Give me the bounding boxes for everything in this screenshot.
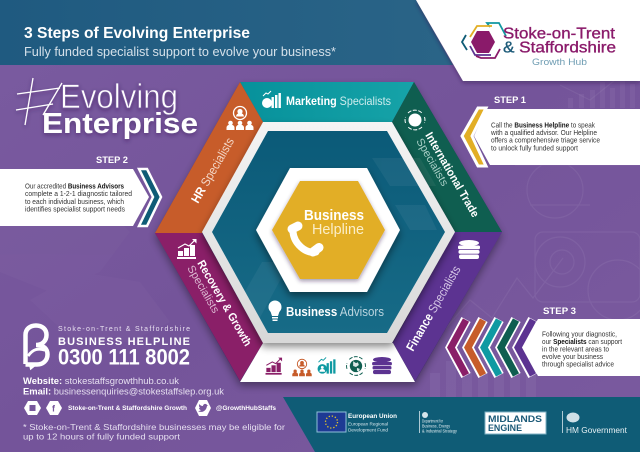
footnote — [23, 422, 285, 442]
inner white ring — [202, 122, 455, 343]
helpline contact block: 0300 111 8002 — [58, 344, 190, 370]
Department for Business logo: & Industrial Strategy — [422, 428, 458, 434]
Midlands Engine logo — [485, 412, 546, 434]
helpline contact block: Stoke-on-Trent & Staffordshire — [58, 326, 190, 333]
helpline contact block: BUSINESS HELPLINE — [58, 336, 190, 348]
panel: business helpline: Helpline — [312, 221, 364, 238]
website and email: Website: stokestaffsgrowthhub.co.uk — [23, 376, 180, 386]
text: step 3 description: Following your diagnostic, — [542, 332, 617, 338]
text: step 1 description — [490, 122, 600, 152]
Department for Business logo: Department for — [422, 418, 443, 424]
footer band — [283, 397, 640, 452]
European Union logo: European Union — [348, 414, 397, 420]
text: step 2 description: Our accredited Business Advisors — [25, 184, 124, 190]
helpline contact block — [58, 326, 190, 370]
label: step 2: STEP 2 — [96, 155, 128, 166]
social links — [24, 400, 277, 416]
segment: marketing specialists — [240, 82, 414, 122]
icon: light bulb — [268, 300, 282, 321]
text: step 3 description: evolve your business — [542, 354, 603, 361]
step 1 — [462, 95, 640, 166]
footnote: up to 12 hours of fully funded support — [23, 432, 181, 442]
website and email — [23, 376, 225, 396]
segment: HR specialists — [155, 82, 263, 233]
European Union logo: European Regional — [348, 422, 388, 428]
Midlands Engine logo: ENGINE — [488, 423, 522, 433]
segment: marketing specialists: Marketing Specialists — [286, 94, 391, 108]
panel: business helpline — [256, 168, 400, 292]
subtitle: Fully funded specialist support to evolve your business* — [24, 44, 336, 59]
text: step 3 description: in the relevant areas to — [542, 346, 609, 354]
segment: recovery and growth specialists: Recovery & Growth — [194, 258, 253, 349]
text: step 1 description: offers a comprehensive triage service — [491, 138, 600, 144]
European Union logo: Development Fund — [348, 428, 388, 434]
segment: HR specialists: HR Specialists — [188, 135, 237, 206]
segment: recovery and growth specialists: Specialists — [184, 264, 222, 316]
logo mark — [462, 23, 506, 58]
hashtag lockup — [16, 78, 198, 140]
label: business helpline: Business — [304, 207, 364, 224]
label: business advisors: Business Advisors — [286, 305, 384, 319]
text: step 3 description — [542, 332, 622, 368]
text: step 1 description: with a qualified advisor. Our Helpline — [490, 130, 597, 137]
icon: telephone — [292, 226, 319, 252]
hashtag lockup: Evolving — [60, 78, 178, 116]
logo wordmark: & Staffordshire — [503, 40, 616, 56]
logo wordmark: Growth Hub — [532, 57, 587, 68]
segment: recovery and growth specialists — [155, 233, 263, 381]
arrow: teal chevron — [139, 169, 161, 226]
text: step 3 description: our Specialists can support — [542, 339, 622, 346]
step 3 — [451, 306, 640, 376]
text: step 2 description — [25, 184, 132, 214]
text: step 3 description: through specialist advice — [542, 362, 614, 368]
arrows: five coloured chevrons — [451, 320, 533, 376]
panel: business advisors — [212, 131, 445, 333]
HM Government logo — [562, 411, 628, 435]
text: step 2 description: identifies specialist support needs — [25, 206, 125, 214]
segment: finance specialists — [393, 232, 502, 381]
header band — [0, 0, 453, 65]
text: step 2 description: to each individual business, which — [25, 199, 124, 206]
Department for Business logo: Business, Energy — [422, 424, 451, 428]
title: 3 Steps of Evolving Enterprise — [24, 25, 250, 42]
logo panel — [416, 0, 640, 81]
hashtag lockup: Enterprise — [42, 108, 198, 140]
icon: helpline B logo — [26, 326, 48, 368]
footnote: * Stoke-on-Trent & Staffordshire businesses may be eligible for — [23, 422, 285, 432]
arrow: yellow chevron — [462, 108, 486, 166]
Midlands Engine logo: MIDLANDS — [488, 414, 542, 424]
segment: finance specialists: Finance Specialists — [403, 263, 464, 354]
segment: international trade specialists: International Trade — [422, 130, 481, 220]
segment: international trade specialists — [392, 82, 502, 232]
website and email: Email: businessenquiries@stokestaffslep.org.uk — [23, 386, 225, 396]
logo wordmark — [503, 26, 616, 68]
text: step 1 description: Call the Business Helpline to speak — [491, 122, 595, 130]
label: step 3: STEP 3 — [543, 306, 576, 317]
logo wordmark: Stoke-on-Trent — [503, 26, 616, 42]
social links: @GrowthHubStaffs — [216, 406, 277, 412]
segment: icon row — [240, 343, 415, 382]
hexagon diagram — [155, 82, 502, 382]
social links: f — [52, 404, 56, 414]
step 2 — [0, 155, 161, 226]
Department for Business logo — [419, 411, 458, 434]
social links: Stoke-on-Trent & Staffordshire Growth — [68, 406, 187, 412]
text: step 2 description: complete a 1-2-1 diagnostic tailored — [25, 191, 132, 198]
label: step 1: STEP 1 — [494, 95, 527, 106]
segment: international trade specialists: Specialists — [413, 136, 451, 189]
European Union logo — [317, 412, 397, 434]
text: step 1 description: to unlock fully funded support — [491, 146, 578, 152]
HM Government logo: HM Government — [566, 425, 628, 435]
